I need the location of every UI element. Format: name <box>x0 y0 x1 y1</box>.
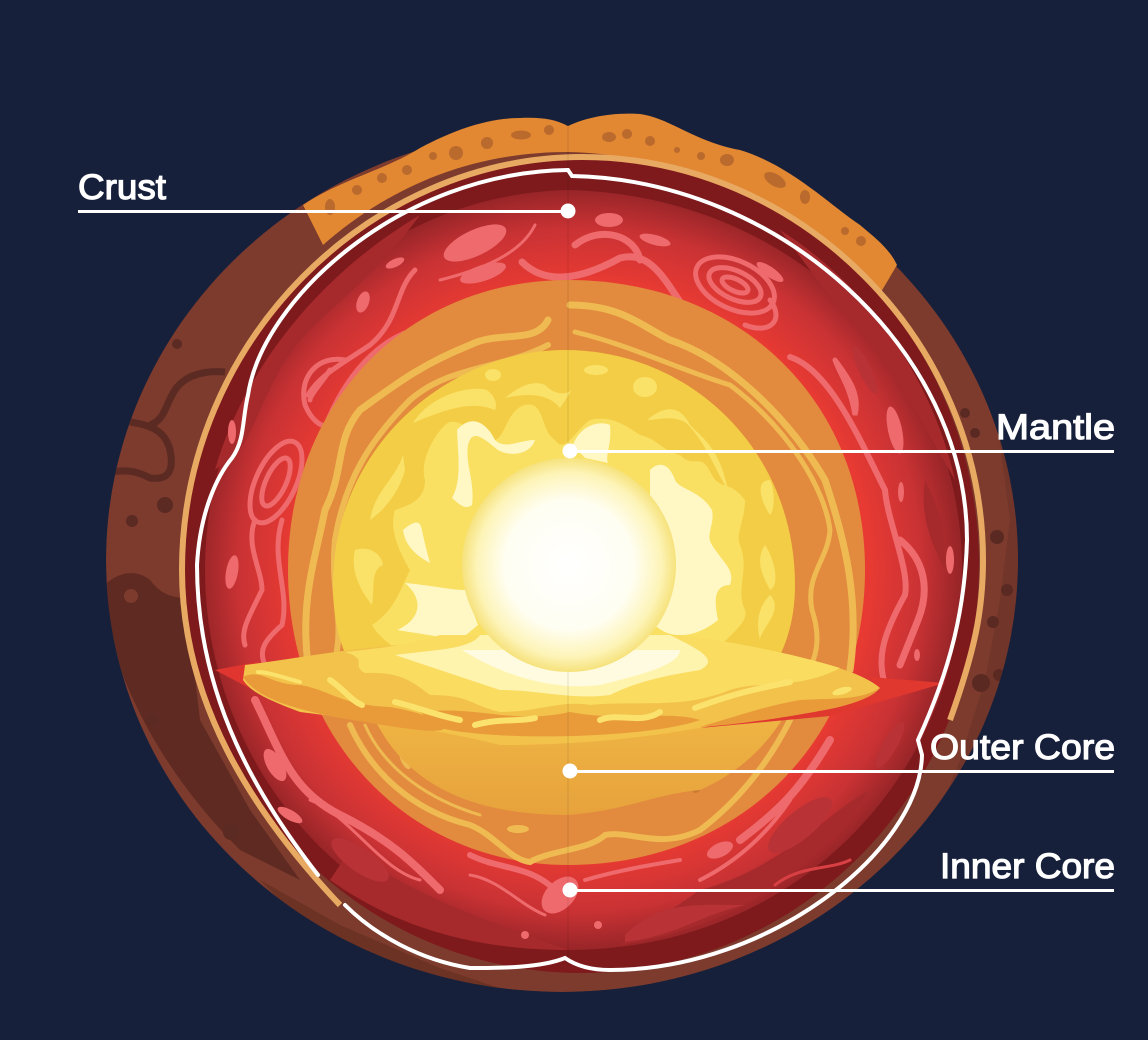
label: Mantle <box>562 408 1115 458</box>
center seam <box>567 125 569 965</box>
label: Inner Core <box>562 847 1115 898</box>
label: Inner Core: Inner Core <box>940 847 1115 886</box>
mantle: darker outer wedges <box>215 215 955 950</box>
label: Outer Core <box>562 728 1115 778</box>
molten yellow layer <box>333 350 795 680</box>
boundary outline <box>197 170 967 970</box>
label: Crust: Crust <box>78 168 166 207</box>
disc: yellow flow <box>345 635 840 712</box>
inner bowl of outer core <box>375 715 785 815</box>
dark red boundary layer <box>183 157 979 973</box>
tan crust boundary line <box>182 157 983 905</box>
label: Outer Core: Outer Core <box>930 728 1115 767</box>
mantle: swirls and streams <box>239 225 924 915</box>
disc: pale flow <box>395 635 708 696</box>
outer core <box>288 280 865 865</box>
molten layer: lobed pale ring <box>372 404 746 670</box>
disc: light streaks <box>330 680 790 725</box>
molten layer: floating light patches <box>354 365 775 640</box>
disc: white center <box>462 650 680 686</box>
mantle <box>205 190 962 950</box>
outer core: flowing yellow bands <box>306 305 853 862</box>
inner core <box>462 458 676 672</box>
infographic: earth layers cross-section <box>78 114 1114 992</box>
crust: orange continental cap <box>303 114 897 292</box>
lower disc: cut plane <box>215 635 945 745</box>
label: Crust <box>78 168 576 218</box>
disc: gold body <box>243 645 880 745</box>
molten layer: white-hot flames <box>397 421 731 640</box>
disc: right red tip <box>700 677 945 728</box>
label: Mantle: Mantle <box>996 408 1115 447</box>
crust: brown outer surface <box>100 128 1020 995</box>
disc: orange lower edge <box>243 674 880 736</box>
disc: left red tip <box>215 662 300 708</box>
